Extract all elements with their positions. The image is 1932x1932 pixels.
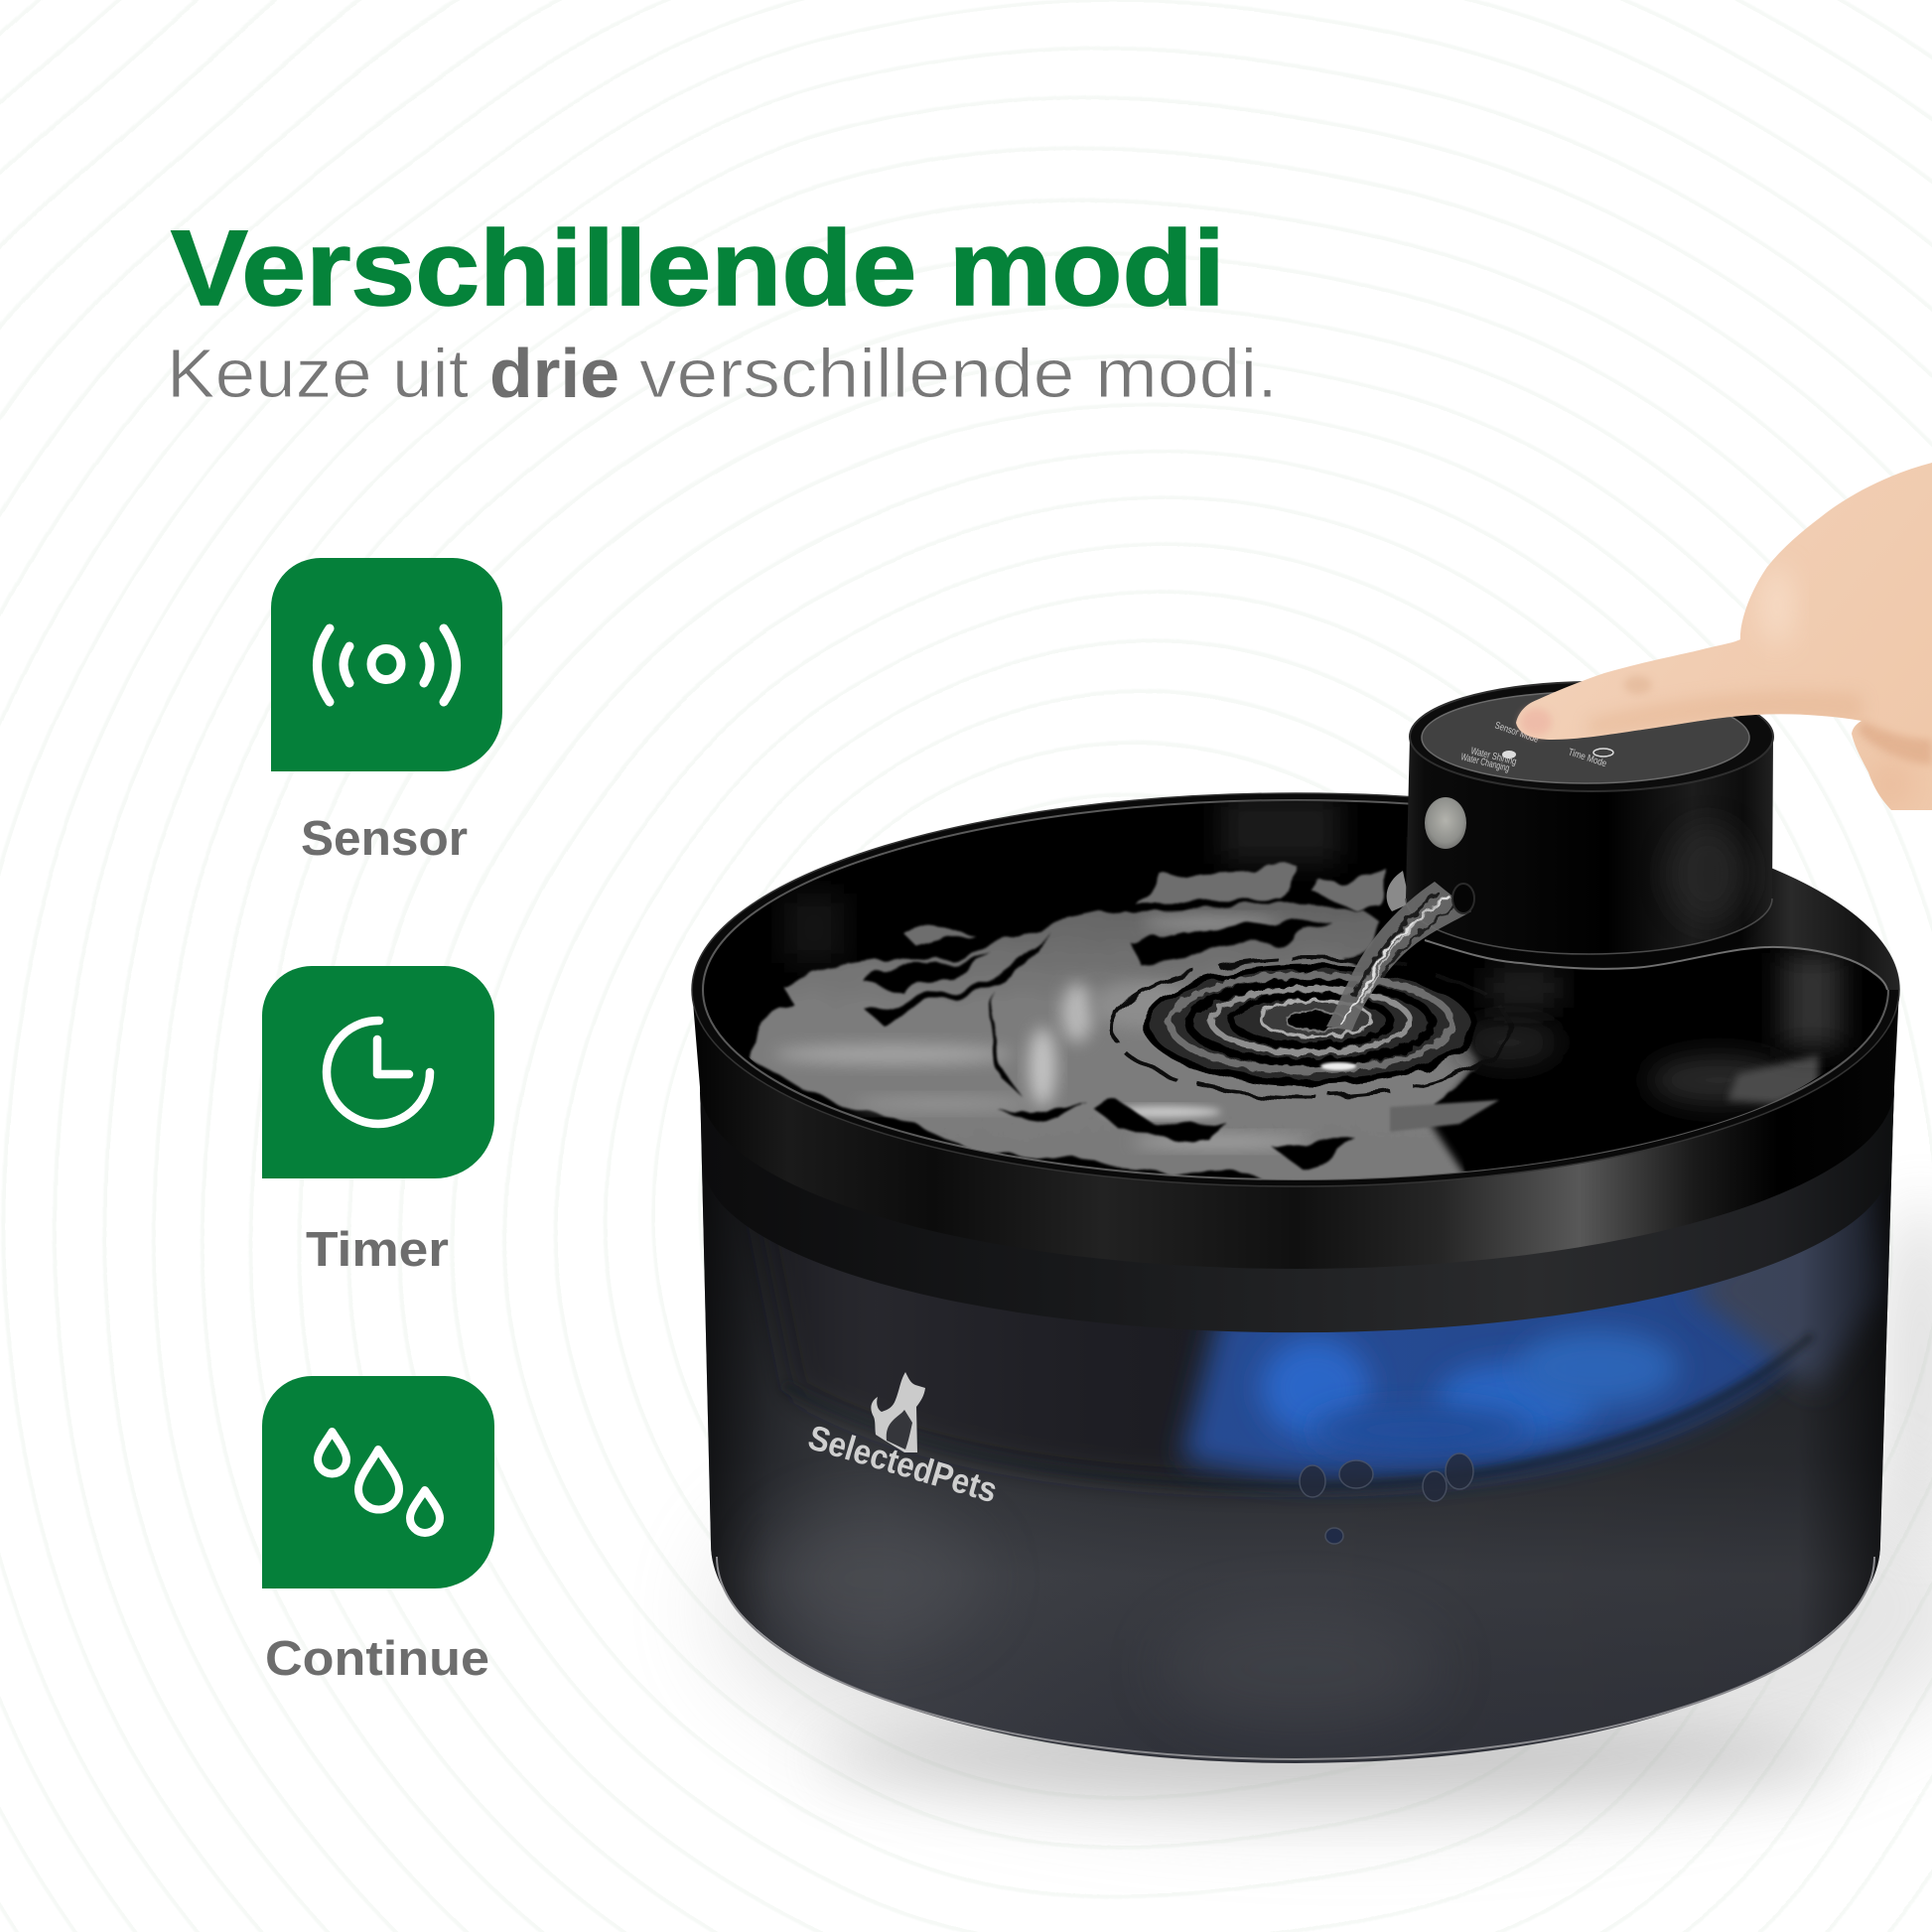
raised platform	[1406, 837, 1899, 990]
tower top	[1410, 682, 1773, 791]
water surface	[743, 871, 1876, 1186]
subtitle: Keuze uit	[167, 335, 469, 412]
control panel: Water Shining	[1469, 746, 1518, 767]
water stream	[1326, 882, 1474, 1031]
hand pressing the panel	[1516, 463, 1932, 810]
icon: clock	[262, 966, 494, 1178]
control panel	[1422, 692, 1749, 783]
subtitle: drie	[489, 335, 620, 412]
icon: panel timer	[1593, 749, 1613, 757]
icon: dog and cat	[871, 1372, 925, 1452]
ripple texture	[1170, 975, 1451, 1070]
subtitle: verschillende modi.	[639, 335, 1278, 412]
label: Sensor: Sensor	[301, 812, 468, 866]
product: water fountain	[692, 682, 1899, 1777]
mode: continue	[262, 1376, 494, 1686]
hand shading	[1588, 566, 1932, 808]
control panel: Sensor Mode	[1493, 720, 1540, 746]
brand logo	[804, 1372, 1002, 1510]
rim band	[692, 990, 1899, 1269]
ripples	[1112, 958, 1509, 1097]
base highlight	[717, 1557, 1874, 1759]
control panel: Time Mode	[1567, 747, 1608, 769]
control panel: Water Changing	[1459, 752, 1510, 774]
platform edge line	[1425, 940, 1887, 990]
water highlights	[774, 917, 1311, 1148]
mode: sensor	[271, 558, 502, 866]
rim top	[692, 793, 1899, 1186]
water line	[784, 1335, 1812, 1486]
tower	[1406, 682, 1773, 954]
bowl interior	[703, 794, 1888, 1186]
mode: timer	[262, 966, 494, 1277]
dark water patches	[864, 920, 1359, 1169]
bubbles	[1300, 1453, 1473, 1544]
icon: sensor waves	[271, 558, 502, 771]
icon: water drops	[262, 1376, 494, 1588]
motion sensor	[1425, 797, 1466, 849]
dark water inside tank	[776, 1245, 1261, 1479]
subtitle	[167, 335, 1278, 412]
fingernail	[1520, 708, 1552, 736]
tank body	[700, 1082, 1894, 1777]
label: Continue: Continue	[265, 1632, 489, 1686]
floor shadow	[715, 1201, 1932, 1817]
label: Timer: Timer	[306, 1223, 449, 1277]
right dark water	[1390, 953, 1876, 1181]
right wall reflections	[1782, 953, 1842, 1047]
gray disc behind spout	[1387, 871, 1410, 911]
blue glow	[1181, 1142, 1886, 1479]
title: Verschillende modi	[171, 207, 1225, 328]
lower band	[700, 1092, 1894, 1332]
brand name: SelectedPets	[804, 1418, 1002, 1510]
spout	[1452, 884, 1474, 913]
icon: panel drops	[1502, 751, 1516, 759]
back reflections	[903, 871, 1391, 945]
